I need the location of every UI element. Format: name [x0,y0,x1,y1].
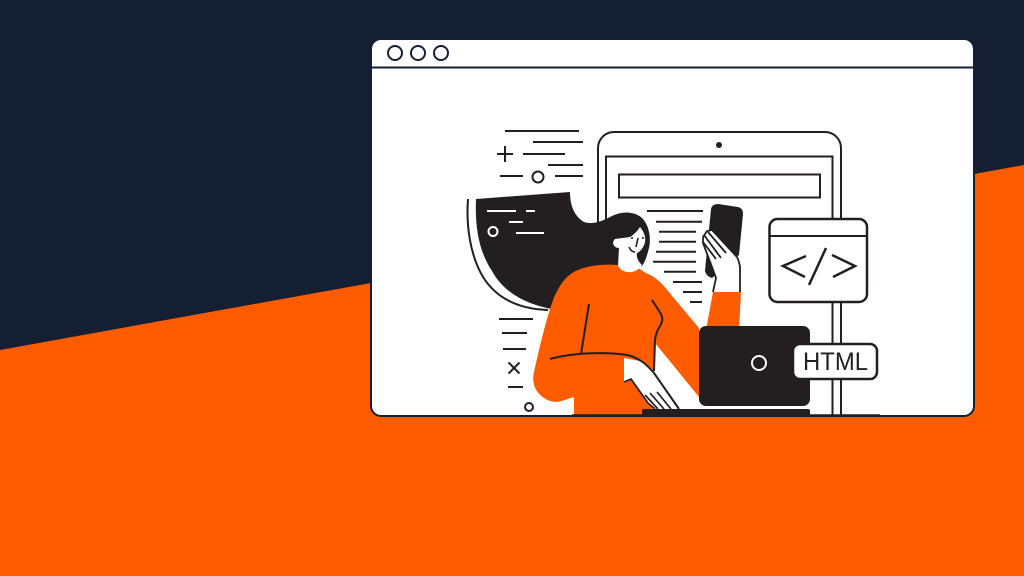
tablet text lines [647,211,703,302]
white gap between arm and body [653,343,699,409]
HTML badge [793,344,877,379]
phone [705,204,743,278]
tablet screen [606,156,832,415]
tablet device [598,132,841,415]
laptop logo [752,356,766,370]
browser window [371,39,974,416]
tablet outer body [598,132,841,415]
raised forearm sleeve [706,292,741,330]
lower hand [624,358,679,409]
code symbol [783,248,855,285]
ground line [572,414,880,416]
laptop base [642,409,810,416]
window title bar divider [372,66,973,68]
hand outline and fingers [703,230,740,292]
code card title divider [770,235,867,237]
decorative lines bottom left [499,319,533,411]
badge text: HTML [803,348,868,376]
sweater [533,265,699,415]
face details [629,237,643,252]
hair [476,192,650,309]
hair outline arc [468,199,548,310]
tablet camera [716,142,722,148]
face and neck [613,227,645,272]
badge frame [793,344,877,379]
hand fill [703,230,740,292]
laptop [642,326,810,416]
code card frame [770,219,867,302]
decorative lines top left [497,131,583,182]
woman figure [468,192,743,415]
background: orange diagonal [0,165,1024,576]
code window card [770,219,867,302]
window frame [371,39,974,416]
laptop lid [699,326,810,406]
tablet search bar [619,174,820,198]
raised hand [703,230,740,292]
window control buttons [388,46,448,60]
sweater seams [550,300,679,409]
hair highlights [487,211,544,236]
